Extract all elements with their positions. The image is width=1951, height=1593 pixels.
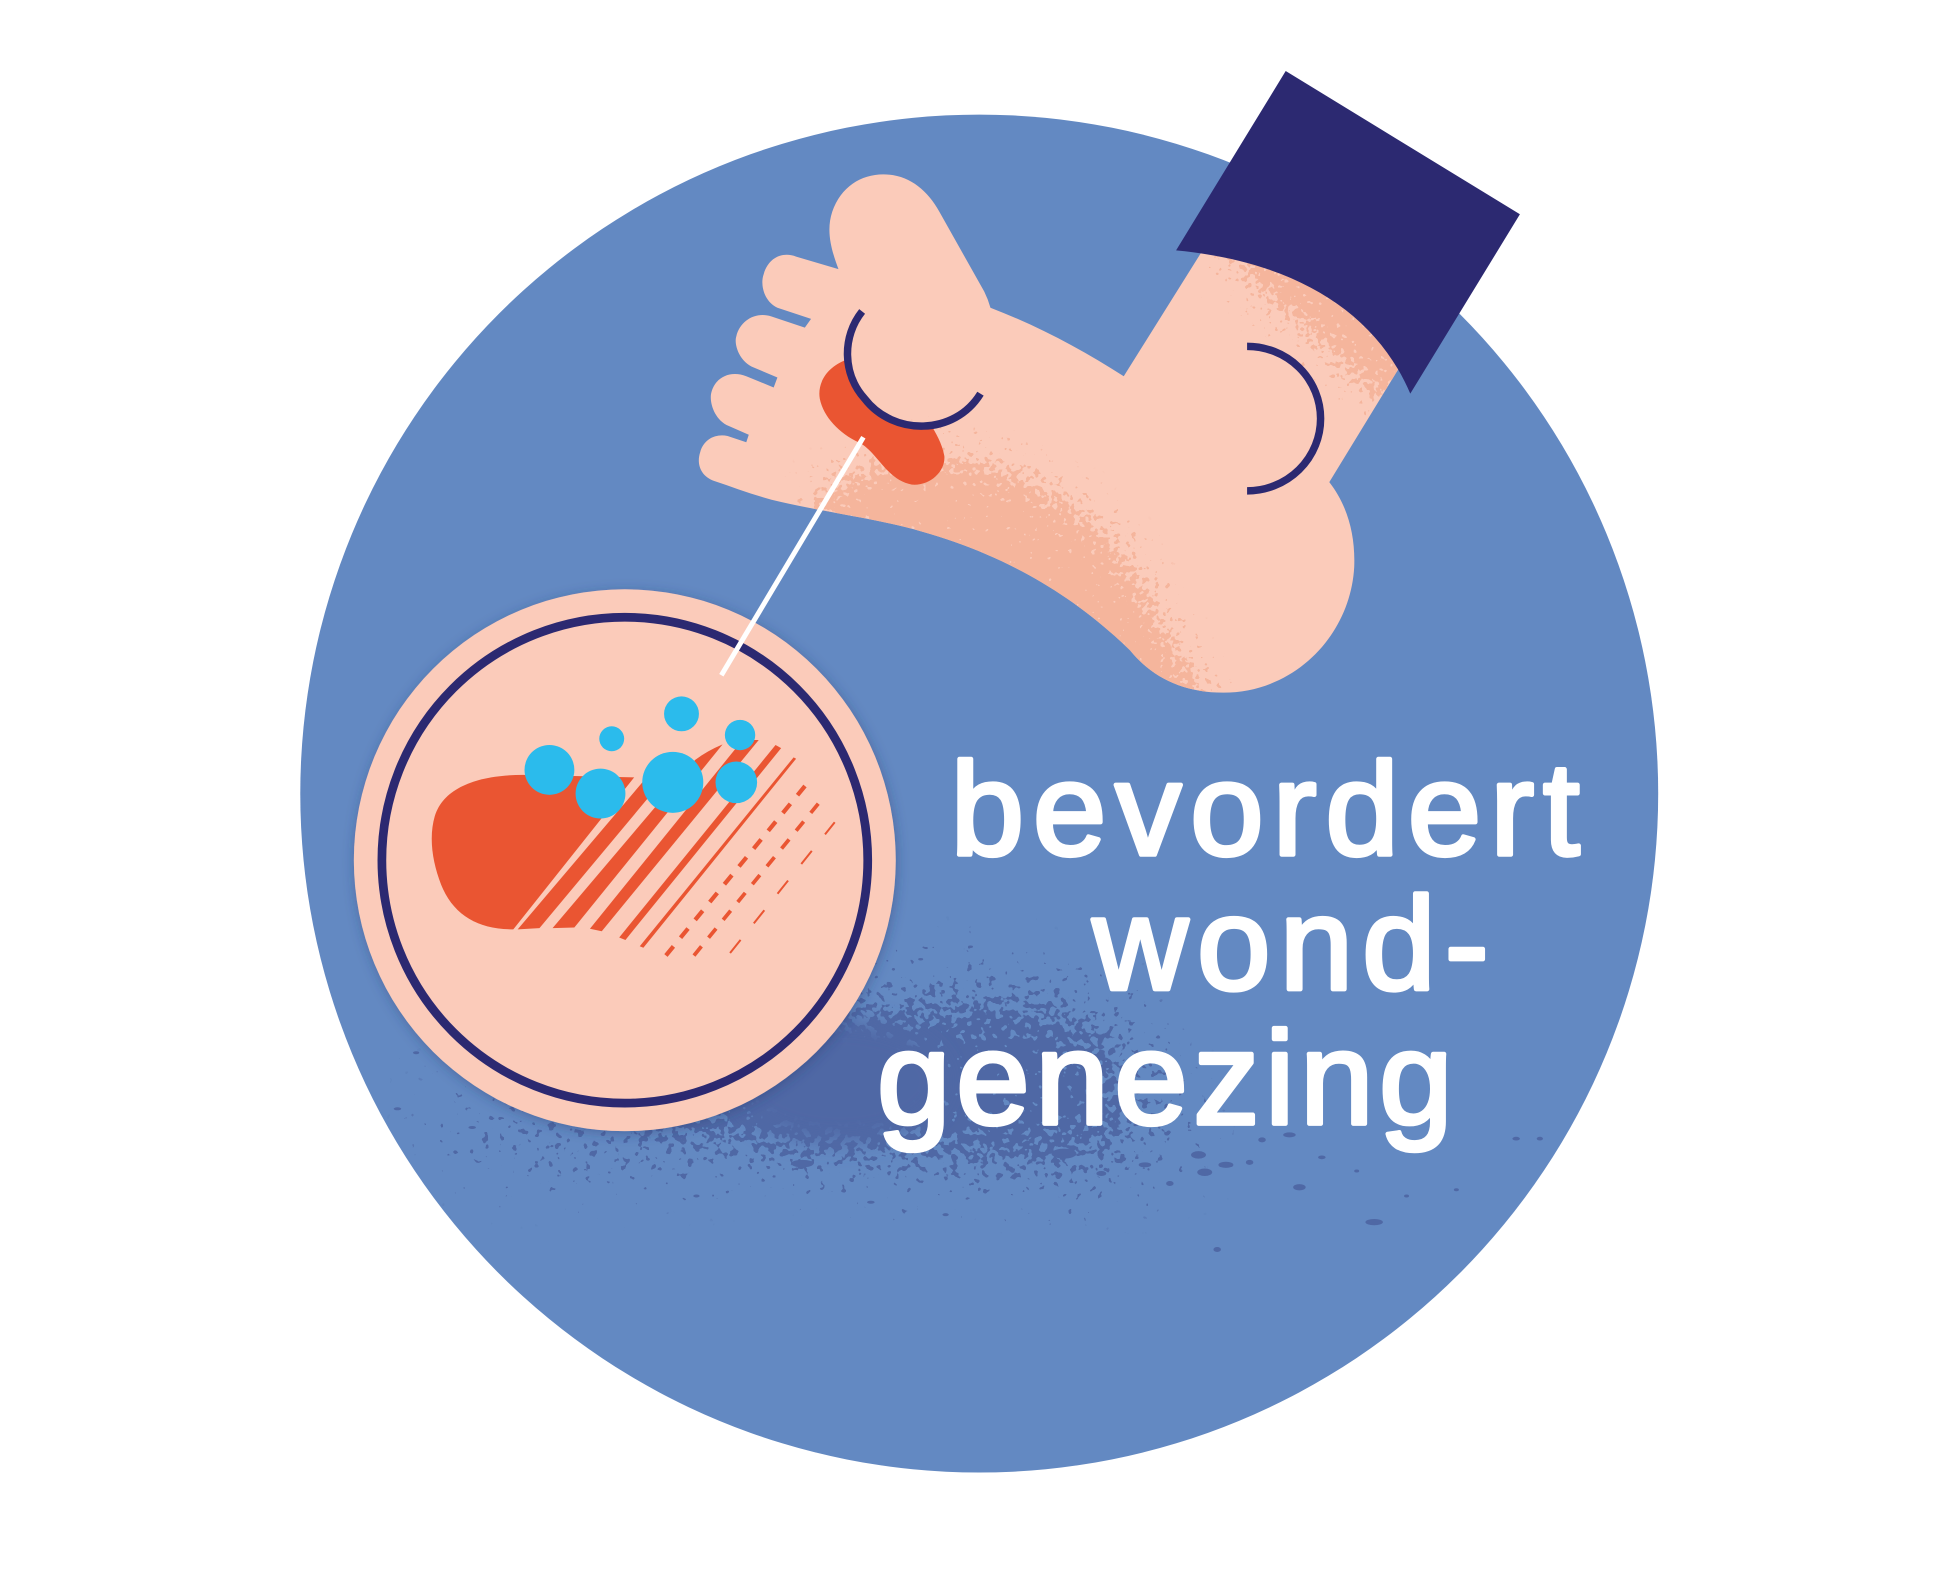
background circle: [300, 115, 1658, 1473]
ankle arc: [1247, 346, 1321, 491]
foot illustration: [699, 71, 1520, 716]
ball of foot arc: [847, 311, 980, 426]
magnifier lens: [354, 589, 896, 1131]
foot shading: [785, 256, 1398, 692]
title: genezing: [877, 1004, 1453, 1152]
sleeve cuff: [1176, 71, 1520, 394]
dashed healing lines: [666, 779, 835, 956]
callout line: [721, 437, 863, 675]
wound on foot: [819, 360, 944, 485]
large spatter drops: [394, 946, 1543, 1252]
speckled ground shadow: [394, 946, 1543, 1252]
title: [877, 735, 1580, 1152]
dense shadow core: [734, 1022, 946, 1141]
lens disc: [354, 589, 896, 1131]
foot: [699, 174, 1444, 693]
title: bevordert: [951, 735, 1580, 883]
infographic: wound healing badge: [300, 71, 1658, 1472]
bubbles: [525, 696, 757, 818]
title: wond-: [1092, 869, 1489, 1017]
magnified wound: [432, 740, 796, 948]
lens ring: [382, 617, 868, 1103]
